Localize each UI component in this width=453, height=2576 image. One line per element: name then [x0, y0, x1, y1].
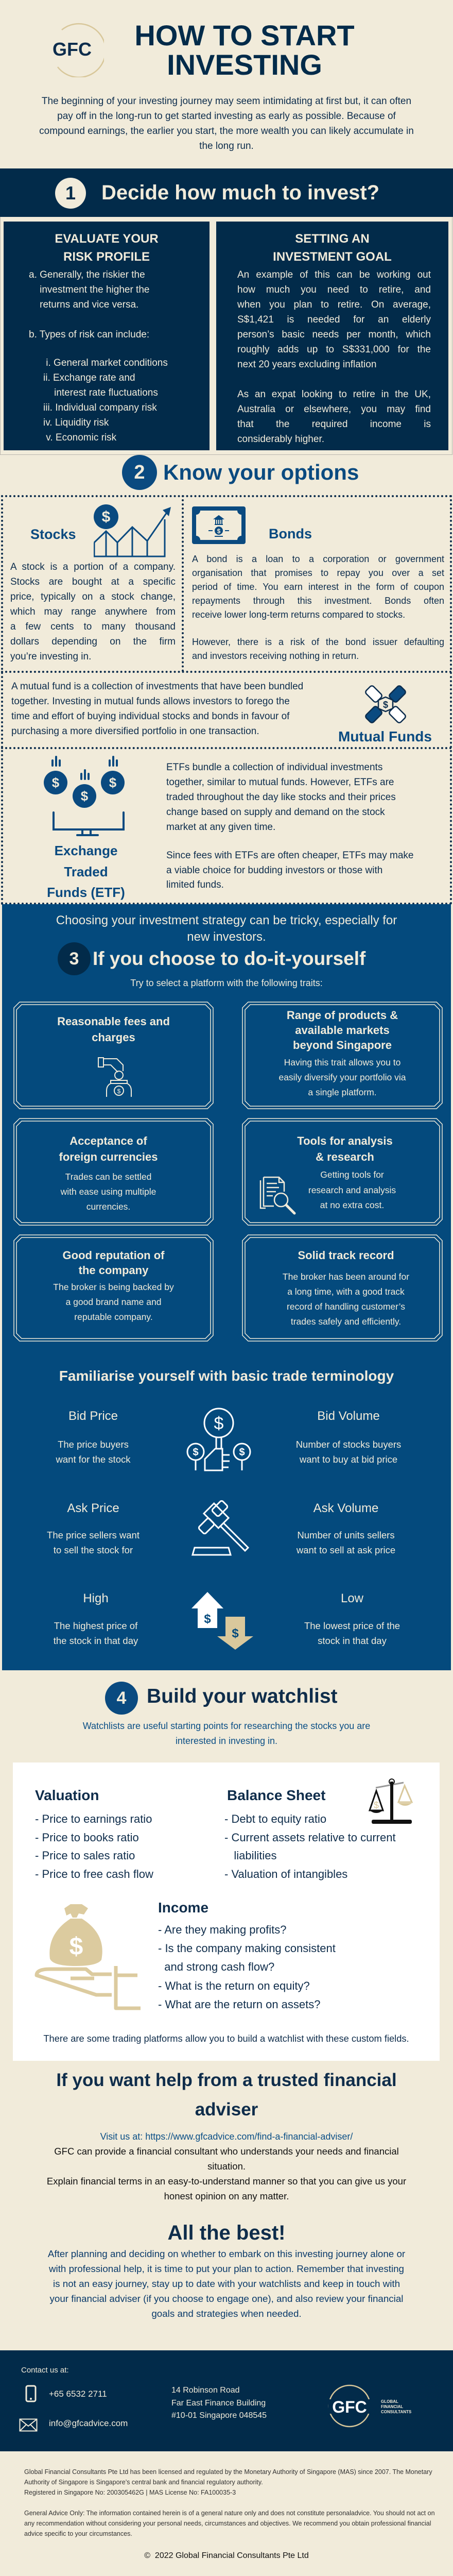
logo: footer GFC: GFC: [332, 2398, 367, 2416]
heading: ETF: Traded: [64, 863, 108, 879]
term: bid price: The price buyers: [58, 1439, 129, 1450]
box: foreign currencies: with ease using multiple: [61, 1187, 156, 1197]
box: foreign currencies: currencies.: [86, 1201, 130, 1212]
term: ask volume: Number of units sellers: [297, 1530, 395, 1540]
panel: risk profile: EVALUATE YOUR: [55, 232, 159, 246]
box: tools for analysis: Getting tools for: [320, 1170, 384, 1180]
logo: GFC: GFC: [53, 39, 92, 60]
text: ETF description: traded throughout the day like stocks and their prices: [166, 792, 396, 803]
text: mutual funds description: together. Investing in mutual funds allows investors to forego the: [11, 696, 290, 707]
box: range of products: Having this trait allows you to: [284, 1057, 400, 1067]
section 3 panel: do-it-yourself: [2, 904, 451, 1670]
disclaimer: [24, 2467, 436, 2539]
panel: risk profile: iii. Individual company risk: [43, 402, 157, 413]
icon: number 2: 2: [134, 462, 145, 483]
text: bonds description: organisation that promises to repay you over a set: [192, 568, 444, 578]
icon: hand with dollar signs: $: [214, 1414, 224, 1433]
text: bonds description: receive lower long-term returns compared to stocks.: [192, 609, 405, 620]
term: bid volume: [296, 1409, 401, 1465]
text: closing paragraph: goals and strategies when needed.: [151, 2308, 302, 2318]
panel: risk profile: iv. Liquidity risk: [43, 417, 109, 428]
income list: - What are the return on assets?: [158, 1998, 320, 2011]
disclaimer: Global Financial Consultants Pte Ltd has been licensed and regulated by the Monetary Authority of Singapore (MAS) since 2007. The Monetary Authority of Singapore is Singapore’s central bank and financial regulatory authority.: [24, 2468, 432, 2486]
panel: risk profile: [4, 222, 210, 450]
text: GFC services: situation.: [207, 2161, 246, 2172]
box: good reputation: reputable company.: [74, 1312, 153, 1322]
text: bonds description: A bond is a loan to a corporation or government: [192, 554, 444, 564]
panel: mutual funds: [11, 681, 432, 744]
logo: GFC: [53, 23, 104, 77]
box: good reputation: Good reputation of: [63, 1249, 164, 1262]
box: solid track record: a long time, with a good track: [287, 1286, 405, 1297]
icon: hand with dollar signs: [186, 1408, 251, 1471]
term: ask volume: [297, 1501, 395, 1555]
title: [134, 19, 355, 81]
logo: footer GFC: FINANCIAL: [381, 2404, 403, 2409]
term: bid price: [56, 1409, 131, 1465]
box: reasonable fees: charges: [92, 1031, 135, 1044]
term: ask price: to sell the stock for: [54, 1545, 133, 1555]
icon: number 2: [122, 455, 157, 490]
term: high: High: [83, 1591, 109, 1605]
balance sheet list: liabilities: [234, 1849, 276, 1862]
heading: ETF: Exchange: [55, 843, 117, 858]
balance sheet list: - Current assets relative to current: [224, 1831, 396, 1843]
footer: contact: Contact us at:: [21, 2366, 69, 2375]
icon: up and down arrows: [191, 1592, 253, 1650]
text: ETF description: together, similar to mutual funds. However, ETFs are: [166, 777, 394, 788]
disclaimer: General Advice Only: The information contained herein is of a general nature only and does not constitute personaladvice. You should not act on any recommendation without considering your personal needs, circumstances and objectives. We recommend you obtain professional financial advice specific to your circumstances.: [24, 2510, 435, 2537]
panel: investment goal: person’s basic needs per month, which: [237, 329, 431, 340]
text: visit us: Visit us at: https://www.gfcadvice.com/find-a-financial-adviser/: [100, 2131, 353, 2142]
term: bid price: Bid Price: [68, 1409, 118, 1423]
valuation list: Valuation: [35, 1787, 99, 1803]
text: mutual funds description: A mutual fund is a collection of investments that have been bundled: [11, 681, 303, 692]
panel: investment goal: S$1,421 is needed for an elderly: [237, 314, 431, 325]
icon: number 4: 4: [117, 1688, 126, 1708]
income list: - Is the company making consistent: [158, 1942, 336, 1955]
heading text: Build your watchlist: [147, 1685, 338, 1707]
icon: up and down arrows: $: [232, 1626, 239, 1640]
text: mutual funds description: time and effort of buying individual stocks and bonds in favour of: [11, 711, 289, 722]
text: bonds description: period of time. You earn interest in the form of coupon: [192, 582, 444, 592]
term: ask volume: Ask Volume: [313, 1501, 378, 1515]
disclaimer: Registered in Singapore No: 200305462G | MAS License No: FA100035-3: [24, 2489, 236, 2496]
panel: investment goal: that the required income is: [237, 419, 431, 430]
text: stocks description: a few cents to many thousand: [10, 621, 176, 632]
panel: ETF: [44, 756, 413, 900]
subtitle: watchlists: interested in investing in.: [176, 1736, 277, 1746]
panel: risk profile: ii. Exchange rate and: [43, 372, 135, 383]
copyright: © 2022 Global Financial Consultants Pte Ltd: [144, 2551, 309, 2560]
box: tools for analysis: research and analysis: [308, 1185, 396, 1195]
logo: footer GFC: CONSULTANTS: [381, 2410, 412, 2414]
icon: email: [19, 2418, 38, 2432]
section 4 heading: [105, 1682, 338, 1715]
text: mutual funds description: [11, 681, 303, 737]
box: good reputation: The broker is being backed by: [53, 1282, 174, 1292]
panel: investment goal: considerably higher.: [237, 434, 324, 445]
icon: number 3: [58, 942, 91, 975]
text: bonds description: repayments through this investment. Bonds often: [192, 596, 444, 606]
footer: contact: [0, 2350, 453, 2451]
icon: number 1: [55, 178, 86, 209]
text: GFC services: [0, 2144, 453, 2204]
box: good reputation: a good brand name and: [66, 1297, 161, 1307]
heading: ETF: [47, 843, 125, 900]
box: tools for analysis: Tools for analysis: [297, 1134, 393, 1147]
intro text: [56, 913, 397, 944]
text: GFC services: Explain financial terms in an easy-to-understand manner so that you can give us your: [47, 2176, 406, 2187]
panel: risk profile: RISK PROFILE: [63, 250, 150, 264]
text: ETF description: change based on supply and demand on the stock: [166, 807, 385, 818]
box: foreign currencies: Trades can be settled: [65, 1172, 151, 1182]
text: stocks description: which may range anywhere from: [10, 606, 176, 617]
text: bonds description: [192, 554, 444, 661]
box: solid track record: The broker has been around for: [283, 1272, 409, 1282]
panel: bonds: [192, 506, 444, 661]
icon: hand with dollar signs: $: [239, 1447, 245, 1458]
icon: stock chart: [94, 504, 171, 557]
income list: [158, 1898, 415, 2011]
icon: money bag in hand: $: [69, 1933, 83, 1960]
panel: investment goal: SETTING AN: [295, 232, 370, 246]
icon: coin in jar: [98, 1057, 132, 1097]
panel: risk profile: interest rate fluctuations: [54, 387, 158, 398]
box: range of products: [242, 1002, 443, 1109]
income list: - Are they making profits?: [158, 1923, 286, 1936]
footer: contact: info@gfcadvice.com: [49, 2418, 128, 2428]
heading: ETF: Funds (ETF): [47, 885, 125, 900]
text: bonds description: and investors receiving nothing in return.: [192, 651, 359, 661]
panel: investment goal: when you plan to retire. On average,: [237, 299, 431, 310]
icon: scale: $: [374, 1800, 379, 1810]
address: Far East Finance Building: [171, 2399, 266, 2407]
panel: investment goal: how much you need to retire, and: [237, 284, 431, 295]
icon: document with magnifier: [259, 1177, 295, 1215]
icon: hands: $: [383, 700, 388, 710]
icon: coins and monitor: $: [109, 775, 117, 790]
valuation list: [35, 1787, 153, 1880]
box: tools for analysis: & research: [316, 1150, 374, 1163]
box: range of products: a single platform.: [308, 1087, 377, 1097]
panel: investment goal: As an expat looking to retire in the UK,: [237, 389, 431, 400]
panel: ETF: Since fees with ETFs are often cheaper, ETFs may make: [166, 850, 413, 861]
text: closing paragraph: [0, 2246, 453, 2320]
icon: stock chart: $: [102, 509, 111, 526]
address: [171, 2384, 267, 2422]
panel: risk profile: v. Economic risk: [46, 432, 116, 443]
section 1 header bar: [0, 168, 453, 217]
heading: all the best: All the best!: [168, 2222, 285, 2244]
text: bonds description: However, there is a risk of the bond issuer defaulting: [192, 637, 444, 647]
term: ask price: [47, 1501, 140, 1555]
address: 14 Robinson Road: [171, 2386, 240, 2395]
panel: investment goal: Australia or elsewhere, you may find: [237, 404, 431, 415]
valuation list: - Price to sales ratio: [35, 1849, 135, 1862]
text: GFC services: GFC can provide a financial consultant who understands your needs and financial: [54, 2146, 399, 2157]
panel: risk profile: i. General market conditions: [46, 358, 168, 368]
icon: hand with dollar signs: $: [193, 1447, 199, 1458]
section 1 frame: [0, 217, 452, 455]
icon: scale: [369, 1776, 415, 1825]
subtitle: watchlists: [82, 1721, 370, 1746]
panel: ETF: limited funds.: [166, 879, 224, 890]
intro text: [39, 96, 414, 151]
term: bid volume: Bid Volume: [317, 1409, 380, 1423]
income list: - What is the return on equity?: [158, 1979, 310, 1992]
panel: risk profile: b. Types of risk can include:: [29, 329, 149, 340]
text: closing paragraph: is not an easy journey, stay up to date with your watchlists and keep in touch with: [53, 2278, 400, 2289]
box: foreign currencies: Acceptance of: [69, 1134, 147, 1147]
footnote: There are some trading platforms allow you to build a watchlist with these custom fields.: [43, 2033, 409, 2044]
box: solid track record: [242, 1234, 443, 1342]
panel: investment goal: INVESTMENT GOAL: [273, 250, 392, 264]
heading: trusted adviser: [0, 2065, 453, 2124]
logo: footer GFC: [327, 2384, 420, 2428]
text: ETF description: [166, 762, 396, 833]
box: foreign currencies: foreign currencies: [59, 1150, 158, 1163]
balance sheet list: - Debt to equity ratio: [224, 1812, 326, 1825]
section 2 heading: [122, 455, 359, 490]
text: stocks description: you’re investing in.: [10, 651, 91, 662]
heading: trusted adviser: adviser: [195, 2099, 258, 2120]
box: tools for analysis: [242, 1118, 443, 1226]
intro text: new investors.: [187, 930, 266, 944]
icon: bond certificate: [192, 506, 246, 544]
text: GFC services: honest opinion on any matter.: [164, 2191, 289, 2201]
text: closing paragraph: with professional help, it is time to put your plan to action. Remember that investing: [49, 2263, 404, 2274]
panel: risk profile: a. Generally, the riskier the: [29, 269, 145, 280]
panel: risk profile: returns and vice versa.: [40, 299, 138, 310]
text: stocks description: price, typically on a stock change,: [10, 591, 176, 602]
term: high: [54, 1591, 138, 1646]
term: low: Low: [341, 1591, 363, 1605]
term: high: the stock in that day: [54, 1635, 138, 1646]
icon: money bag in hand: [34, 1903, 142, 2011]
panel: stocks: [10, 504, 176, 662]
term: low: [304, 1591, 400, 1646]
heading: trade terminology: Familiarise yourself with basic trade terminology: [59, 1368, 394, 1384]
text: closing paragraph: your financial adviser (if you choose to engage one), and also review your financial: [50, 2293, 403, 2304]
valuation list: - Price to books ratio: [35, 1831, 139, 1843]
heading: decide how much: Decide how much to invest?: [101, 181, 379, 204]
term: ask price: Ask Price: [67, 1501, 119, 1515]
heading text: Know your options: [163, 460, 359, 484]
term: low: stock in that day: [318, 1635, 387, 1646]
icon: coins and monitor: [44, 756, 125, 836]
term: bid volume: Number of stocks buyers: [296, 1439, 401, 1450]
box: range of products: easily diversify your portfolio via: [278, 1072, 406, 1082]
balance sheet list: Balance Sheet: [227, 1787, 325, 1803]
text: ETF description: market at any given time.: [166, 822, 275, 833]
term: bid volume: want to buy at bid price: [300, 1454, 397, 1465]
text: stocks description: dollars depending on the firm: [10, 636, 176, 647]
box: reasonable fees: Reasonable fees and: [57, 1015, 170, 1028]
title: INVESTING: [167, 48, 322, 81]
term: bid price: want for the stock: [56, 1454, 130, 1465]
income list: and strong cash flow?: [164, 1960, 274, 1973]
icon: coin in jar: $: [117, 1088, 121, 1095]
heading 3: [58, 942, 365, 975]
logo: footer GFC: GLOBAL: [381, 2399, 398, 2404]
footer: contact: +65 6532 2711: [49, 2389, 107, 2399]
intro text: the long run.: [199, 141, 254, 151]
icon: bond certificate: $: [217, 528, 221, 535]
title: HOW TO START: [134, 19, 355, 52]
subtitle: Try to select a platform with the following traits:: [130, 978, 323, 988]
icon: up and down arrows: $: [204, 1612, 211, 1626]
icon: hands: [365, 685, 406, 723]
panel: risk profile: investment the higher the: [40, 284, 149, 295]
panel: investment goal: An example of this can be working out: [237, 269, 431, 280]
icon: coins and monitor: $: [81, 788, 89, 804]
term: low: The lowest price of the: [304, 1620, 400, 1631]
icon: phone: [25, 2385, 37, 2402]
text: stocks description: [10, 562, 176, 662]
text: stocks description: Stocks are bought at a specific: [10, 577, 176, 587]
valuation list: - Price to earnings ratio: [35, 1812, 152, 1825]
heading: trusted adviser: If you want help from a trusted financial: [56, 2070, 397, 2090]
intro text: The beginning of your investing journey may seem intimidating at first but, it can often: [42, 96, 411, 107]
panel: ETF: a viable choice for budding investors or those with: [166, 865, 382, 876]
panel: watchlist white box: [13, 1762, 440, 2061]
intro text: pay off in the long-run to get started investing as early as possible. Because of: [57, 111, 396, 122]
icon: coins and monitor: $: [52, 775, 60, 790]
box: reasonable fees: [13, 1002, 214, 1109]
term: high: The highest price of: [54, 1620, 137, 1631]
term: ask price: The price sellers want: [47, 1530, 140, 1540]
panel: investment goal: [216, 222, 448, 450]
box: tools for analysis: at no extra cost.: [320, 1200, 384, 1210]
box: solid track record: record of handling customer’s: [287, 1301, 405, 1312]
text: closing paragraph: After planning and deciding on whether to embark on this investing journey alone or: [48, 2248, 405, 2259]
box: good reputation: the company: [79, 1264, 148, 1277]
text: ETF description: ETFs bundle a collection of individual investments: [166, 762, 382, 773]
icon: number 1: 1: [65, 182, 76, 204]
address: #10-01 Singapore 048545: [171, 2411, 267, 2420]
panel: investment goal: next 20 years excluding inflation: [237, 359, 376, 370]
heading: bonds: Bonds: [269, 526, 312, 541]
heading text: If you choose to do-it-yourself: [93, 948, 365, 969]
box: foreign currencies: [13, 1118, 214, 1226]
balance sheet list: [224, 1787, 396, 1880]
income list: Income: [158, 1900, 208, 1916]
icon: number 4: [105, 1682, 138, 1715]
box: solid track record: trades safely and efficiently.: [291, 1316, 401, 1327]
panel: investment goal: roughly adds up to S$331,000 for the: [237, 344, 431, 355]
balance sheet list: - Valuation of intangibles: [224, 1867, 347, 1880]
subtitle: watchlists: Watchlists are useful starting points for researching the stocks you are: [83, 1721, 370, 1731]
heading: mutual funds: Mutual Funds: [338, 728, 432, 744]
heading: stocks: Stocks: [30, 527, 76, 542]
icon: number 3: 3: [69, 949, 79, 969]
text: stocks description: A stock is a portion of a company.: [10, 562, 176, 572]
term: ask volume: want to sell at ask price: [297, 1545, 395, 1555]
options grid frame: [1, 495, 452, 905]
intro text: Choosing your investment strategy can be tricky, especially for: [56, 913, 397, 927]
box: range of products: available markets: [295, 1024, 390, 1037]
box: good reputation: [13, 1234, 214, 1342]
text: mutual funds description: purchasing a more diversified portfolio in one transaction.: [11, 726, 259, 737]
icon: gavel: [191, 1500, 249, 1556]
box: solid track record: Solid track record: [298, 1249, 394, 1262]
box: range of products: Range of products &: [287, 1009, 398, 1022]
box: range of products: beyond Singapore: [293, 1039, 392, 1052]
valuation list: - Price to free cash flow: [35, 1867, 153, 1880]
intro text: compound earnings, the earlier you start, the more wealth you can likely accumulate in: [39, 126, 414, 137]
